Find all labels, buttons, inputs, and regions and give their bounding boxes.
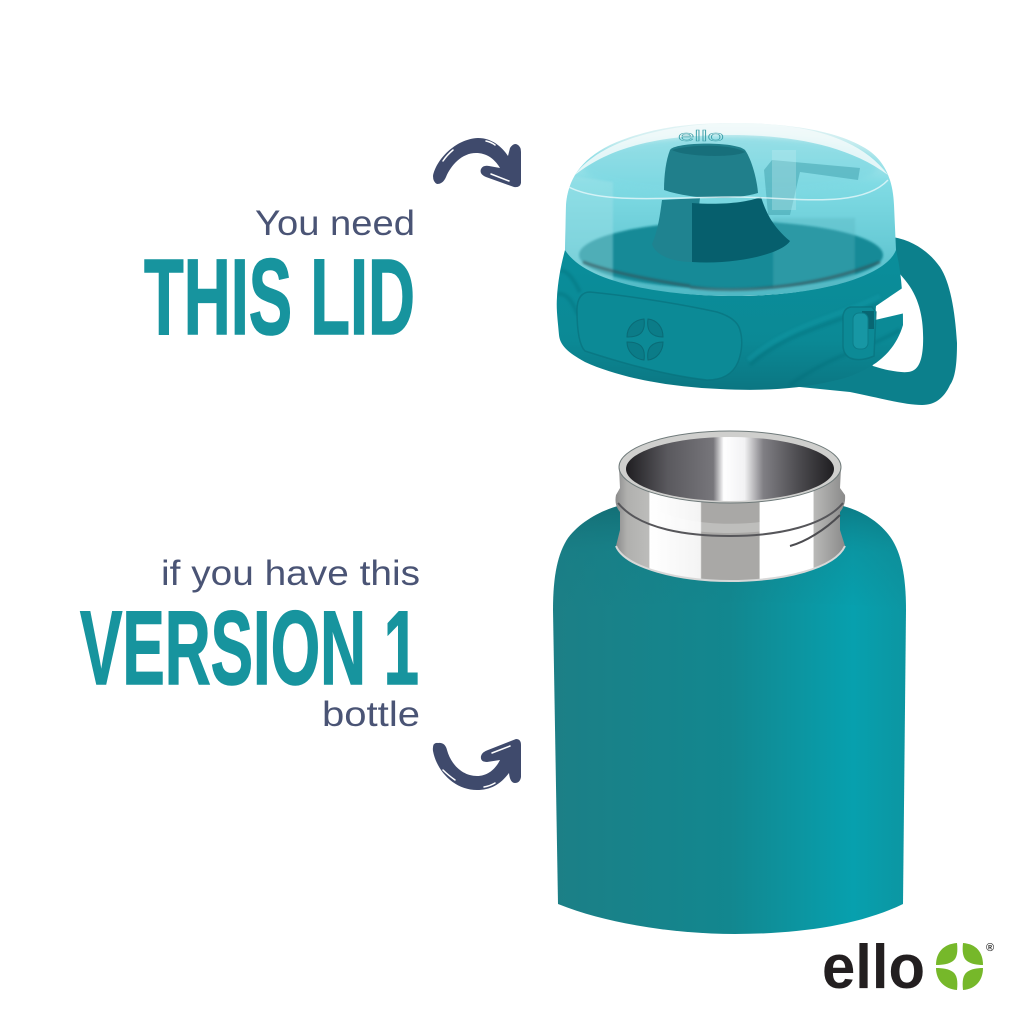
bottle body [553,506,906,934]
lid handle [790,237,957,405]
notch beside slider [875,287,905,320]
dome contents [565,123,888,290]
heading: you need this lid [144,204,415,357]
right lighter panel [773,218,855,290]
arrow: curved up toward bottle [433,739,521,790]
headline: this lid: THIS LID [144,236,415,357]
metal neck [616,468,845,581]
ello logo [822,933,994,1002]
bottle shoulder shading [553,506,906,610]
icon: panel clover mark [627,319,663,360]
arrow: curved down toward lid [433,138,521,187]
top surface tint [582,135,878,178]
logo wordmark: ello [822,933,925,1002]
spout dark part [692,197,790,262]
bottle [553,431,906,934]
rim [619,431,841,503]
top white highlight [575,123,888,175]
logo clover [936,943,983,990]
lid [553,123,957,405]
heading: if you have this version 1 bottle [80,554,420,734]
text: bottle: bottle [322,695,420,734]
inner base disc [579,221,883,289]
seam line [567,180,888,200]
spout left pale part [652,198,700,262]
button panel [577,292,742,380]
neck thread [618,503,843,536]
lock slider [843,307,876,360]
text: you need: You need [255,204,415,243]
lid dome [565,123,896,296]
vertical clear post [772,150,796,210]
inner mechanism [764,160,860,215]
inner cap top face [672,146,745,156]
headline: version 1: VERSION 1 [80,590,419,707]
registered mark: ® [986,942,994,954]
neck lower groove [790,515,840,546]
neck base rim [616,546,845,581]
upper band soft highlight [650,505,812,533]
left pale wall [565,175,613,290]
bottom dark reflection [583,262,880,290]
embossed ello on dome: ello [678,128,724,145]
lid band [557,250,903,390]
inner cap upper [664,144,758,198]
bottle interior [626,437,834,501]
text: if you have this: if you have this [161,554,420,593]
band ribs [557,268,899,362]
